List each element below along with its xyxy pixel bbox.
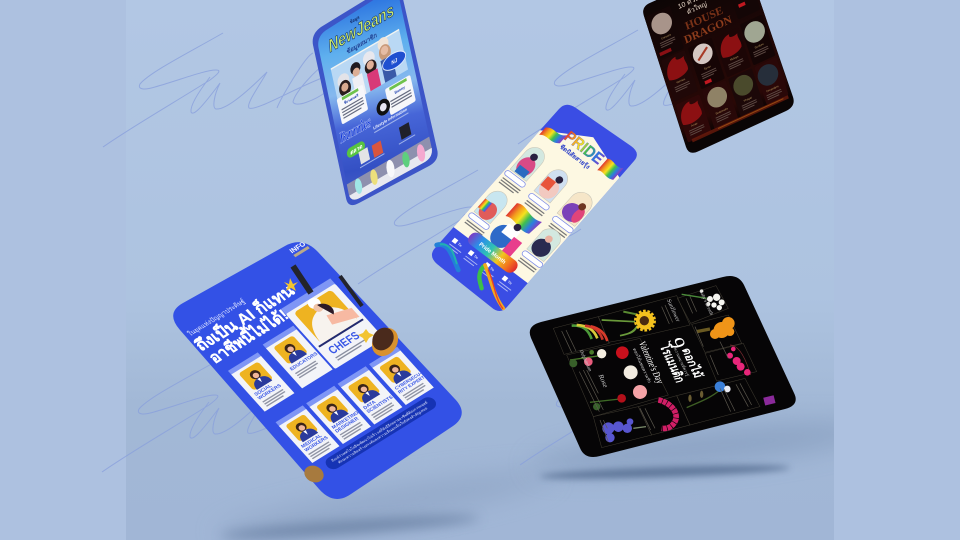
text: fan information: Lifestyle information (373, 106, 408, 131)
legend: source list: Tie (457, 242, 463, 248)
footer: note pill (323, 395, 439, 472)
card: dragon portrait 4 (728, 68, 764, 117)
illustration: central flag group (490, 203, 542, 257)
illustration: pride couple 2 (523, 165, 574, 216)
callout: left profile box: ชื่อวงดนตรี (343, 92, 359, 105)
card: Social Workers (228, 352, 294, 412)
footer: note pill: ทักษะความคิดสร้างสรรค์และความเห็นอกเห็นใจยังคงสำคัญเสมอ (336, 405, 428, 464)
icon: sunflower (602, 311, 655, 336)
heading: PRIDE: PRIDE (560, 128, 607, 168)
cream house-shaped background (454, 130, 620, 284)
heading: 9 flowers Valentine title: Delphinium (577, 350, 592, 372)
heading: 9 flowers Valentine title: ดอกไม้แทนความรัก (632, 348, 652, 384)
legend: source list (449, 238, 512, 292)
card: crest 2 (676, 94, 712, 143)
heading: 9 flowers Valentine title: ดอกไม้ (679, 346, 707, 379)
card: top right item (738, 2, 746, 8)
panel: AI cannot replace careers card (173, 240, 462, 499)
heading: 9 flowers Valentine title: Rose (596, 374, 609, 388)
card: Cybersecurity Experts: CYBERSECU- (394, 371, 423, 391)
card: Chefs: CHEFS (325, 329, 363, 357)
card: dragon portrait 5 (742, 18, 775, 65)
icon: chocolate donut (367, 323, 403, 361)
panel: House of the Dragon infographic card (638, 0, 794, 153)
card: dragon portrait 3: Seasmoke (715, 106, 729, 116)
icon: magenta wreath (658, 400, 676, 428)
badge: green pill (346, 141, 365, 158)
heading: House of the Dragon title: HOUSE (684, 5, 725, 33)
card: Social Workers: WORKERS (257, 383, 283, 401)
heading: 9 flowers Valentine title: โรแมนติก (656, 342, 689, 384)
card: Data Scientists: DATA (362, 399, 378, 411)
footer: note pill: ถึงแม้ว่าเทคโนโลยีจะพัฒนาไปเร็ว แต่ก็ยังมีอีกหลายอาชีพที่ต้องการมนุษย์ (329, 399, 429, 464)
illustration: pride couple 1 (497, 142, 551, 196)
illustration: pride couple 4 (464, 190, 508, 236)
icon: INFO logo (763, 395, 776, 406)
heading: 9 flowers Valentine title: ความหมายที่ควรรู้ (672, 347, 690, 377)
card: Marketing Designer: MARKETING (331, 410, 361, 431)
card: dragon portrait 1: Caraxes (661, 32, 672, 41)
icon: cookie (302, 463, 326, 485)
heading: AI title: ถึงเป็น AI ก็แทน (189, 279, 299, 354)
card: dragon portrait 3 (707, 86, 738, 128)
panel: Pride infographic card (432, 105, 637, 311)
text: Bunnies script: Bunnies (337, 113, 373, 148)
icon: sparkle star (284, 278, 374, 343)
callout: left profile box (336, 88, 368, 124)
card: Marketing Designer (306, 386, 371, 444)
heading: New Jeans title: ข้อมูล (349, 13, 360, 26)
badge: Pride Month pill (468, 232, 518, 273)
icon: larkspur purple (602, 418, 646, 442)
card: crest 3: Meleys (729, 54, 739, 62)
icon: blue forget-me-nots (687, 381, 731, 408)
heading: 9 flowers Valentine title: Sunflower (665, 298, 682, 322)
icon: INFO logo: INFO (289, 241, 308, 255)
card: dragon portrait 1 (651, 12, 676, 56)
card: Chefs (281, 278, 384, 369)
logo sticker: NJ (391, 57, 398, 67)
card: dragon portrait 4: Vhagar (743, 95, 753, 103)
icon: white rose (624, 365, 638, 379)
info text bars (562, 297, 752, 442)
heading: House of the Dragon title: ตัวใหญ่ (686, 0, 708, 16)
icon: rainbow ribbons (437, 244, 503, 308)
heading: AI title: อาชีพนี้ไม่ได้! (202, 303, 292, 367)
heading: New Jeans title: ข้อมูลสมาชิก (346, 31, 378, 57)
card: Data Scientists: SCIENTISTS (366, 394, 395, 415)
panel outlines (553, 286, 760, 448)
callout: right profile box (385, 75, 416, 116)
logo sticker (382, 50, 406, 71)
icon: white flower cluster (682, 289, 725, 310)
card: crest 2: Arrax (691, 121, 699, 128)
heading: 9 flowers Valentine title: 9 (663, 335, 691, 351)
heading: 9 flowers Valentine title (565, 290, 738, 403)
callout: right profile box: Bunny (394, 85, 406, 95)
illustration: pride couple 3 (547, 188, 598, 239)
icon: lanyard strap (293, 266, 362, 306)
heading: AI title: ในยุคแห่งปัญญาประดิษฐ์ (186, 297, 247, 338)
card: crest 1: Vermax (676, 77, 686, 85)
icon: red rose stem (590, 394, 626, 410)
icon: album covers (357, 120, 415, 168)
signature watermark scribbles (102, 30, 747, 472)
heading: 9 flowers Valentine title: Baby's Breath (697, 290, 714, 316)
card: crest 1 (667, 56, 690, 92)
icon: rose bouquet (569, 349, 606, 367)
legend: source list: Tie (507, 280, 513, 286)
icon: bird of paradise (572, 325, 607, 341)
card: Data Scientists (338, 366, 402, 425)
icon: red rose (616, 346, 629, 359)
icon: rainbow flag left (539, 123, 567, 148)
icon: bleeding hearts (727, 345, 751, 376)
heading: PRIDE: ชีดนิสัยสายรุ้ง (558, 143, 592, 171)
panel: New Jeans infographic card (312, 0, 438, 206)
panel: Valentine flowers infographic card (530, 276, 796, 457)
icon: rainbow flag right (597, 157, 623, 181)
illustration: snowy bunny band (346, 136, 432, 200)
card: dragon portrait 5: Sunfyre (754, 42, 765, 50)
card: Cybersecurity Experts: RITY EXPERTS (397, 373, 428, 394)
card: Marketing Designer: DESIGNER (334, 416, 361, 434)
photo: group portrait (330, 28, 408, 99)
card: dragon portrait 6 (758, 64, 788, 104)
card: dragon portrait 6: Dreamfyre (766, 84, 780, 93)
heading: House of the Dragon title (678, 0, 732, 44)
card: Medical Workers (276, 405, 339, 463)
card: dragon portrait 2: Syrax (703, 64, 712, 71)
floor shadows (221, 419, 834, 540)
card: Medical Workers: MEDICAL (300, 433, 323, 450)
icon: black bunny badge (376, 98, 390, 116)
illustration: pride couple 5 (518, 228, 561, 272)
card: Social Workers: SOCIAL (253, 383, 273, 398)
card: dragon portrait 2 (692, 44, 724, 89)
badge: Pride Month pill: Pride Month (477, 242, 507, 266)
card: Educators (263, 326, 333, 388)
card: crest 3 (720, 33, 750, 76)
heading: House of the Dragon title: DRAGON (683, 14, 734, 47)
fire embers band (692, 95, 789, 142)
badge: green pill: ตลาด (350, 143, 364, 157)
legend: source list: Tie (489, 266, 495, 272)
card: Educators: EDUCATORS (289, 351, 320, 372)
icon: pink rose (633, 385, 647, 399)
heading: 9 flowers Valentine title: Valentine's Day (636, 340, 665, 385)
legend: source list: Tie (473, 254, 479, 260)
icon: orange flower (697, 317, 735, 339)
card: Cybersecurity Experts (369, 345, 436, 405)
card: Medical Workers: WORKERS (303, 435, 330, 453)
